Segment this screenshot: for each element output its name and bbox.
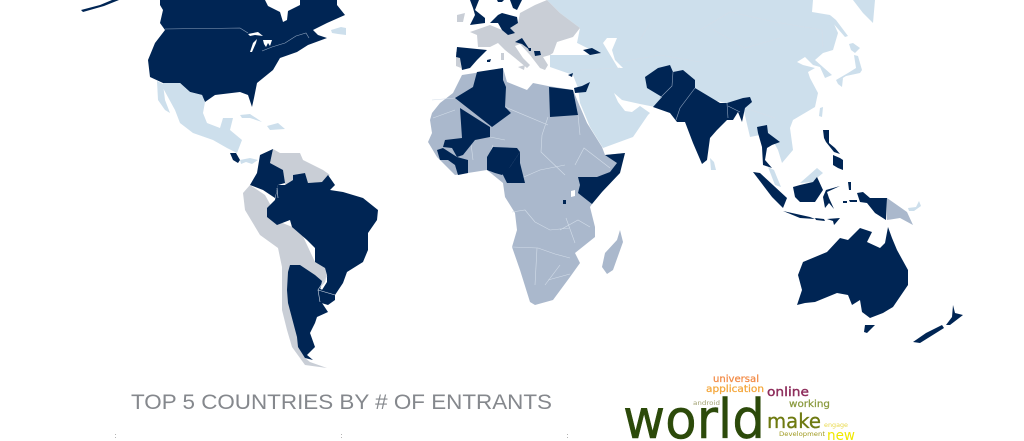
canada and usa	[148, 0, 345, 107]
asia borders	[580, 12, 823, 118]
united kingdom	[470, 0, 485, 25]
lesser sunda islands	[815, 218, 840, 225]
newfoundland	[331, 27, 346, 35]
sri lanka	[710, 158, 716, 170]
kenya and somalia	[578, 153, 625, 204]
great lakes	[248, 32, 272, 52]
australia	[797, 227, 908, 318]
sweden	[510, 0, 522, 10]
africa borders	[432, 98, 610, 285]
word: Development: Development	[779, 430, 825, 438]
lake victoria	[571, 190, 575, 197]
andes and guianas	[243, 185, 327, 368]
rwanda	[563, 200, 566, 204]
guinea liberia ivory coast	[437, 148, 468, 175]
column tick marks	[115, 434, 568, 438]
region: europe	[456, 0, 601, 77]
croatia	[515, 38, 530, 50]
egypt	[549, 87, 578, 117]
thailand	[757, 125, 780, 168]
germany and benelux	[490, 13, 518, 35]
balearics	[487, 59, 491, 62]
hudson bay	[265, 0, 300, 22]
malay peninsula	[768, 167, 781, 187]
afghanistan pakistan india	[645, 65, 752, 164]
borneo	[793, 177, 823, 202]
madagascar	[602, 230, 623, 274]
word: android: android	[693, 400, 720, 407]
venezuela and guyanas	[270, 149, 330, 185]
tasmania	[864, 325, 875, 333]
sakhalin	[853, 0, 875, 23]
caribbean	[240, 114, 285, 130]
russian far east sliver	[830, 15, 848, 37]
philippines	[823, 130, 843, 170]
sumatra	[753, 172, 787, 208]
mexico and central america	[163, 83, 242, 153]
alaska strip	[81, 0, 119, 12]
cameroon	[502, 152, 525, 183]
region: south america	[243, 149, 378, 368]
costa rica	[230, 153, 240, 163]
word cloud	[623, 374, 855, 441]
brazil	[267, 173, 378, 295]
algeria	[455, 68, 511, 127]
word: make: make	[767, 409, 821, 433]
java	[783, 211, 815, 219]
north borneo	[800, 168, 823, 183]
honshu	[836, 55, 862, 87]
persian gulf	[614, 93, 660, 113]
denmark	[497, 0, 504, 2]
nigeria	[487, 147, 520, 175]
caspian sea	[603, 38, 623, 68]
ireland	[457, 13, 465, 22]
africa continent	[428, 68, 625, 305]
argentina	[287, 265, 328, 360]
south asia borders	[660, 72, 740, 120]
region: asia and middle east	[547, 0, 875, 187]
uruguay border	[277, 188, 335, 302]
word: application: application	[706, 384, 764, 395]
taiwan	[819, 107, 823, 117]
bosnia dot	[528, 48, 531, 51]
word: online: online	[767, 384, 809, 399]
spain	[456, 47, 487, 70]
cyprus	[568, 73, 573, 77]
portugal	[456, 50, 461, 68]
russia china and arabia	[547, 0, 838, 163]
europe mainland	[470, 0, 580, 70]
mali	[443, 108, 490, 157]
word: engage: engage	[824, 422, 848, 429]
title: TOP 5 COUNTRIES BY # OF ENTRANTS	[131, 390, 552, 414]
uruguay	[318, 288, 335, 305]
black sea	[555, 38, 587, 55]
region: africa	[428, 68, 625, 305]
word: universal: universal	[713, 374, 759, 385]
new zealand north island	[946, 305, 963, 325]
georgia and armenia	[583, 48, 601, 55]
region: southeast asia and oceania	[753, 125, 963, 343]
new britain	[908, 201, 921, 211]
word: working: working	[789, 399, 830, 410]
indonesian papua	[857, 192, 887, 220]
sulawesi	[823, 186, 840, 209]
papua new guinea	[887, 198, 913, 225]
world map	[81, 0, 963, 368]
sardinia and sicily	[501, 53, 525, 70]
new zealand south island	[913, 325, 944, 343]
us canada border	[165, 28, 309, 51]
region: india and south asia	[645, 65, 752, 164]
moluccas	[843, 182, 857, 203]
balkan country	[534, 51, 541, 56]
region: north america	[81, 0, 346, 164]
colombia	[250, 149, 285, 198]
israel and jordan	[574, 82, 590, 93]
panama	[240, 158, 258, 164]
baja california	[157, 81, 170, 113]
hokkaido	[849, 43, 860, 53]
